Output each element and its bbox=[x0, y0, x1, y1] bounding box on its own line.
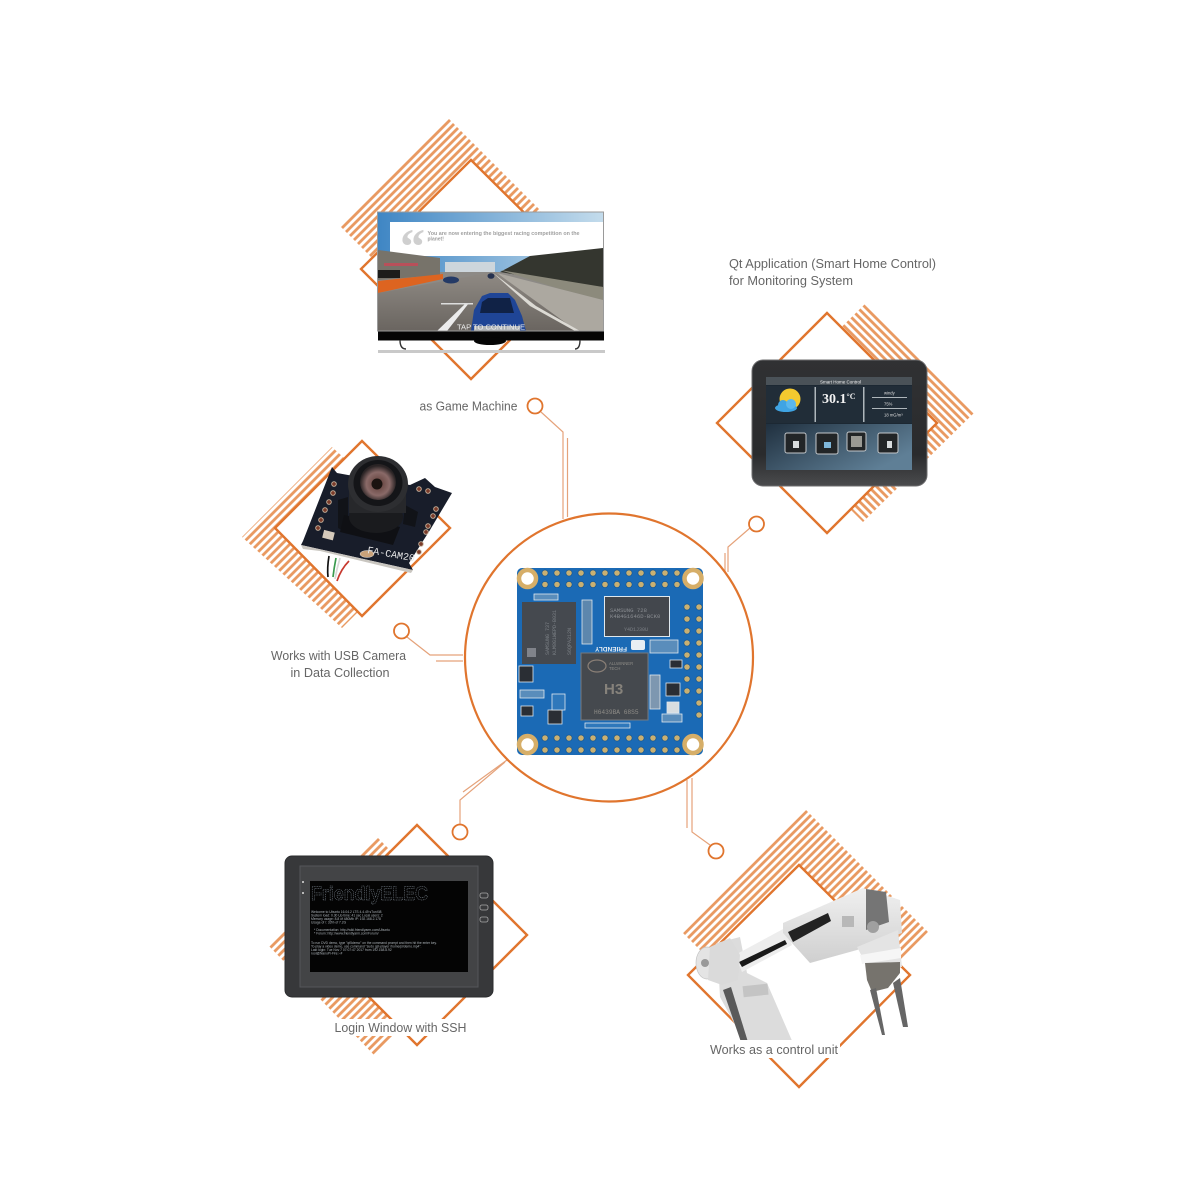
flash chip bbox=[522, 602, 576, 664]
label: monitoring: for Monitoring System bbox=[729, 273, 853, 288]
screen caption line 2: planet! bbox=[428, 236, 444, 242]
icon: TV running racing game bbox=[378, 212, 605, 353]
stripes: control unit bbox=[683, 810, 928, 1055]
terminal text: root@NanoPi-Fire:~# bbox=[311, 952, 342, 956]
central ring bbox=[465, 514, 753, 802]
terminal text: Usage of /: 33% of 7.2G bbox=[311, 920, 347, 924]
label: data collection: in Data Collection bbox=[290, 665, 390, 680]
flash chip: KLM8G1WEPD-B031 bbox=[552, 610, 558, 655]
screen caption: You are now entering the biggest racing competition on the bbox=[428, 231, 580, 237]
small components bbox=[519, 594, 682, 728]
terminal text: To run DVD demo, type "qt5demo" on the command prompt and then hit the enter key. bbox=[311, 941, 437, 945]
wires bbox=[328, 556, 349, 581]
stripes: SSH login bbox=[268, 837, 485, 1056]
icon: wall tablet bbox=[752, 360, 927, 486]
panel: smart home bbox=[717, 256, 975, 533]
icon: weather bbox=[775, 388, 800, 412]
RAM chip: K4B4G1646D-BCK0 bbox=[610, 613, 661, 620]
label: control unit: Works as a control unit bbox=[710, 1042, 838, 1057]
panel: control unit bbox=[683, 810, 928, 1087]
label: game machine: as Game Machine bbox=[420, 398, 518, 414]
label: smart home: Qt Application (Smart Home Control) bbox=[729, 256, 936, 271]
board marking: FA-CAM20 bbox=[366, 546, 416, 565]
temperature: 30.1 bbox=[822, 392, 846, 407]
room buttons bbox=[785, 432, 898, 454]
diamond outline: game machine bbox=[361, 160, 581, 379]
RAM chip: Y4D1J30U bbox=[624, 627, 648, 633]
button glyphs bbox=[793, 436, 892, 448]
H3 SoC: H3 bbox=[604, 681, 623, 698]
terminal text: Last login: Tue Nov 7 07:07:47 2017 from 192.168.8.92 bbox=[311, 948, 392, 952]
icon: camera module bbox=[301, 456, 452, 581]
flash chip: S6QPA312N bbox=[567, 628, 573, 655]
flash chip: SAMSUNG 737 bbox=[545, 622, 551, 655]
connectors: circuit traces bbox=[407, 412, 750, 845]
H3 SoC: H6439BA 68S5 bbox=[594, 709, 639, 716]
diamond outline: USB camera bbox=[275, 441, 450, 616]
node circles bbox=[394, 398, 764, 858]
diamond outline: SSH login bbox=[307, 825, 527, 1045]
H3 SoC: TECH bbox=[609, 666, 620, 671]
humidity: 75% bbox=[884, 402, 893, 406]
icon: terminal monitor bbox=[285, 856, 493, 997]
terminal text: Memory usage: 8.8 of 480Mb IP: 192.168.2.178 bbox=[311, 917, 381, 921]
terminal text: * Documentation: http://wiki.friendlyarm.com/Ubuntu bbox=[314, 928, 390, 932]
tablet title: Smart Home Control bbox=[820, 380, 861, 384]
stripes: game machine bbox=[340, 118, 541, 319]
silkscreen logo: FRIENDLY bbox=[594, 645, 627, 652]
panel: SSH login bbox=[268, 825, 527, 1056]
pm: 18 mG/m³ bbox=[884, 412, 903, 418]
stripes: smart home bbox=[754, 303, 975, 522]
terminal text: * Forum: http://www.friendlyarm.com/Forum/ bbox=[314, 932, 379, 936]
right pin rows bbox=[684, 604, 702, 718]
panel: game machine bbox=[340, 118, 605, 414]
label background: SSH login bbox=[332, 1019, 469, 1036]
terminal text: Welcome to Ubuntu 16.04.2 LTS 4.4.49 sTunXi8 bbox=[311, 910, 382, 914]
icon: robot arm bbox=[696, 888, 908, 1043]
mounting holes bbox=[519, 570, 702, 753]
label: USB camera: Works with USB Camera bbox=[271, 648, 407, 663]
diamond outline: smart home bbox=[717, 313, 937, 533]
temperature: °C bbox=[846, 392, 856, 401]
panel: core board bbox=[517, 568, 703, 755]
diamond outline: control unit bbox=[688, 865, 910, 1087]
terminal text bbox=[311, 910, 437, 956]
label: SSH login: Login Window with SSH bbox=[334, 1020, 466, 1035]
terminal banner: FriendlyELEC bbox=[311, 883, 428, 905]
windy: windy bbox=[884, 390, 896, 396]
board substrate bbox=[517, 568, 703, 755]
label background: control unit bbox=[708, 1040, 840, 1058]
terminal text: To play a video demo, use command "sudo gst-player /home/pi/demo.mp4". bbox=[311, 944, 422, 948]
silkscreen badge bbox=[631, 640, 645, 650]
tap to continue: TAP TO CONTINUE bbox=[457, 322, 525, 332]
top pin rows bbox=[542, 570, 680, 588]
stripes: USB camera bbox=[242, 447, 432, 628]
H3 SoC bbox=[581, 653, 648, 720]
bottom pin rows bbox=[542, 735, 680, 753]
panel: USB camera bbox=[242, 441, 452, 680]
icon: quote mark: “ bbox=[400, 218, 425, 274]
H3 SoC: ALLWINNER bbox=[609, 661, 633, 666]
RAM chip bbox=[604, 596, 670, 636]
terminal text: System load: 0.30 Up time: 41 sec Local users: 2 bbox=[311, 914, 383, 918]
RAM chip: SAMSUNG 728 bbox=[610, 607, 647, 614]
